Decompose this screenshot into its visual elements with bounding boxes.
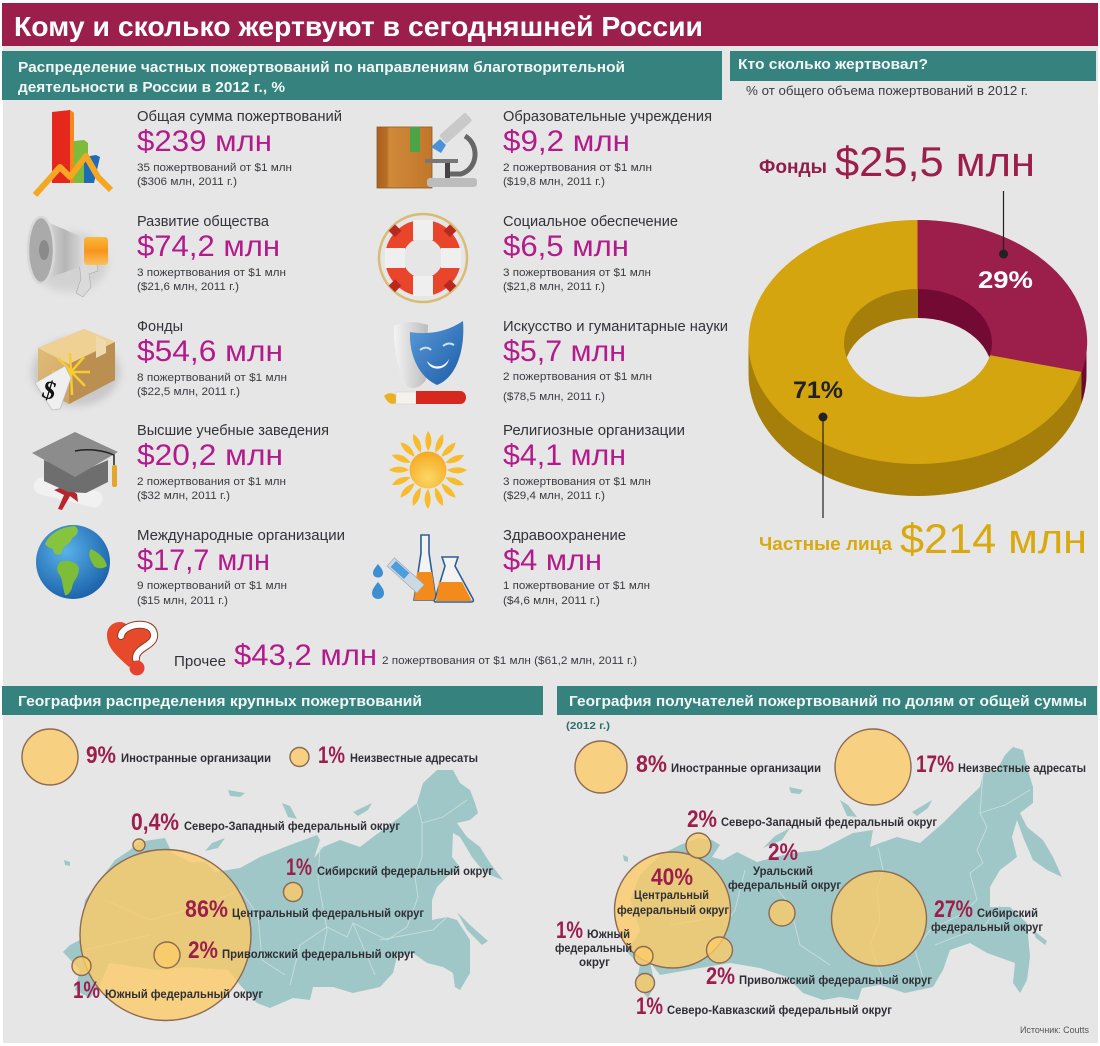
item: international organisations: ($15 млн, 2011 г.) xyxy=(137,595,228,607)
icon: bar chart xyxy=(35,110,111,195)
heading: donation distribution: Распределение частных пожертвований по направлениям благотворительной xyxy=(18,59,625,76)
panel: donation categories xyxy=(28,109,728,676)
item: other: Прочее xyxy=(174,654,226,670)
icon: theatre masks and brush xyxy=(384,321,466,404)
heading: who donated how much: Кто сколько жертвовал? xyxy=(738,56,928,73)
title bar xyxy=(2,3,1098,46)
item: social welfare xyxy=(503,214,678,293)
item: educational institutions: ($19,8 млн, 2011 г.) xyxy=(503,176,605,188)
leader line: foundations xyxy=(999,191,1008,258)
label: foundations amount: $25,5 млн xyxy=(835,138,1035,185)
source note: Источник: Coutts xyxy=(1020,1025,1089,1035)
item: society: ($21,6 млн, 2011 г.) xyxy=(137,281,239,293)
labels, left map: Северо-Западный федеральный округ xyxy=(184,821,400,833)
labels, right map: Иностранные организации xyxy=(671,763,821,775)
item: foundations xyxy=(137,319,287,398)
labels, right map: Приволжский федеральный округ xyxy=(739,975,932,987)
item: international organisations: $17,7 млн xyxy=(137,544,270,577)
item: educational institutions xyxy=(503,109,712,188)
heading: who donated how much xyxy=(730,51,1096,81)
circle: southern district xyxy=(72,956,91,976)
labels, left map: 86% xyxy=(185,896,228,923)
label: 29 percent: 29% xyxy=(978,267,1033,294)
panel: who donated xyxy=(746,84,1087,562)
item: healthcare: Здравоохранение xyxy=(503,528,626,544)
labels, left map: 1% xyxy=(73,977,100,1004)
title bar: Кому и сколько жертвуют в сегодняшней России xyxy=(14,11,703,42)
icon: graduation cap with diploma xyxy=(32,432,118,510)
labels, right map xyxy=(555,751,1086,1020)
labels, left map: Приволжский федеральный округ xyxy=(222,949,415,961)
item: foundations: ($22,5 млн, 2011 г.) xyxy=(137,386,240,398)
labels, right map: федеральный xyxy=(555,943,632,955)
item: religious organisations: ($29,4 млн, 2011 г.) xyxy=(503,490,605,502)
item: arts and humanities: 2 пожертвования от $1 млн xyxy=(503,371,652,383)
label: foundations amount: Фонды xyxy=(759,157,827,178)
map of Russia, left xyxy=(63,770,503,1008)
icon: parcel box with price tag xyxy=(32,329,120,410)
item: arts and humanities: $5,7 млн xyxy=(503,335,626,368)
labels, right map: 27% xyxy=(934,896,973,923)
panel: left map of donations xyxy=(22,729,503,1020)
icon: lifebuoy xyxy=(379,214,467,302)
labels, right map: 1% xyxy=(636,993,663,1020)
labels, left map: Неизвестные адресаты xyxy=(350,753,478,765)
labels, right map: Северо-Кавказский федеральный округ xyxy=(667,1005,892,1017)
heading: geography of donations: География распределения крупных пожертвований xyxy=(18,693,422,710)
circle: siberian district xyxy=(832,871,926,966)
labels, right map: 2% xyxy=(706,963,735,990)
icon: flasks and syringe xyxy=(372,535,473,602)
item: religious organisations: 3 пожертвования от $1 млн xyxy=(503,476,651,488)
circle: central district xyxy=(614,852,730,968)
item: social welfare: 3 пожертвования от $1 млн xyxy=(503,267,651,279)
item: foundations: $54,6 млн xyxy=(137,335,283,368)
circle: foreign organisations xyxy=(575,741,627,793)
labels, left map: 1% xyxy=(286,854,312,881)
item: educational institutions: 2 пожертвования от $1 млн xyxy=(503,162,652,174)
circle: north caucasus district xyxy=(636,974,654,992)
labels, right map: Центральный xyxy=(634,890,709,902)
leader line: private individuals xyxy=(818,412,828,518)
circle: volga district xyxy=(706,937,732,963)
item: educational institutions: $9,2 млн xyxy=(503,125,630,158)
labels, right map: 1% xyxy=(556,917,583,944)
item: foundations: Фонды xyxy=(137,319,183,335)
circle: siberian district xyxy=(284,882,302,902)
item: total: ($306 млн, 2011 г.) xyxy=(137,176,237,188)
labels, left map: 1% xyxy=(318,742,345,769)
circle: ural district xyxy=(769,900,795,926)
labels, right map: Неизвестные адресаты xyxy=(958,763,1086,775)
labels, right map: Уральский xyxy=(753,866,813,878)
item: other: $43,2 млн xyxy=(234,639,377,672)
label: private individuals amount xyxy=(759,515,1087,562)
item: universities: Высшие учебные заведения xyxy=(137,423,329,439)
heading: geography of recipients xyxy=(557,686,1097,715)
item: universities: 2 пожертвования от $1 млн xyxy=(137,476,286,488)
labels, right map: Сибирский xyxy=(977,908,1038,920)
circle: unknown recipients xyxy=(835,729,911,805)
labels, left map: Сибирский федеральный округ xyxy=(317,866,493,878)
item: total: Общая сумма пожертвований xyxy=(137,109,342,125)
label: private individuals amount: Частные лица xyxy=(759,534,893,554)
item: healthcare: ($4,6 млн, 2011 г.) xyxy=(503,595,600,607)
labels, right map: округ xyxy=(579,957,610,969)
item: total: $239 млн xyxy=(137,125,272,158)
item: religious organisations: $4,1 млн xyxy=(503,439,626,472)
item: foundations: 8 пожертвований от $1 млн xyxy=(137,372,287,384)
labels, right map: 2% xyxy=(768,839,798,866)
item: society: $74,2 млн xyxy=(137,230,280,263)
icon: book and microscope xyxy=(377,112,477,188)
icon: sun xyxy=(389,431,467,509)
labels, right map: федеральный округ xyxy=(728,880,841,892)
item: religious organisations: Религиозные организации xyxy=(503,423,685,439)
item: international organisations: 9 пожертвований от $1 млн xyxy=(137,580,287,592)
item: social welfare: $6,5 млн xyxy=(503,230,629,263)
labels, right map: Южный xyxy=(587,929,630,941)
item: international organisations xyxy=(137,528,345,607)
item: religious organisations xyxy=(503,423,685,502)
labels, left map: 9% xyxy=(86,742,116,769)
labels, left map: Южный федеральный округ xyxy=(105,989,263,1001)
icon: globe xyxy=(36,525,110,599)
item: arts and humanities xyxy=(503,319,728,403)
label: 71 percent: 71% xyxy=(793,377,843,404)
heading: donation distribution: деятельности в России в 2012 г., % xyxy=(18,79,285,96)
labels, right map: 2% xyxy=(687,806,717,833)
year note: (2012 г.) xyxy=(566,721,610,732)
item: social welfare: Социальное обеспечение xyxy=(503,214,678,230)
labels, right map: 17% xyxy=(916,751,954,778)
labels, right map: 40% xyxy=(651,864,693,891)
icon: parcel box with price tag: $ xyxy=(39,375,60,406)
subtitle: % от общего объема пожертвований в 2012 г. xyxy=(746,84,1028,98)
heading: geography of donations xyxy=(2,686,543,715)
labels, left map: 0,4% xyxy=(131,809,179,836)
heading: donation distribution xyxy=(2,51,722,100)
icon: heart with question mark xyxy=(107,621,154,676)
item: universities xyxy=(137,423,329,502)
item: universities: ($32 млн, 2011 г.) xyxy=(137,490,230,502)
circle: foreign organisations xyxy=(22,729,78,785)
item: other: 2 пожертвования от $1 млн ($61,2 млн, 2011 г.) xyxy=(382,655,637,667)
circle: north-west district xyxy=(686,833,711,858)
item: other xyxy=(174,639,637,672)
labels, left map: Иностранные организации xyxy=(121,753,271,765)
labels, right map: 8% xyxy=(636,751,667,778)
circle: southern district xyxy=(634,946,653,966)
labels, right map: федеральный округ xyxy=(617,905,729,917)
item: arts and humanities: Искусство и гуманитарные науки xyxy=(503,319,728,335)
heading: geography of recipients: География получателей пожертвований по долям от общей суммы xyxy=(569,693,1087,710)
circle: volga district xyxy=(154,942,180,968)
item: total xyxy=(137,109,342,188)
item: educational institutions: Образовательные учреждения xyxy=(503,109,712,125)
chart: 3D donut xyxy=(748,220,1087,496)
item: total: 35 пожертвований от $1 млн xyxy=(137,162,292,174)
item: society: Развитие общества xyxy=(137,214,270,230)
labels, left map xyxy=(73,742,493,1004)
item: healthcare: 1 пожертвование от $1 млн xyxy=(503,580,650,592)
map of Russia, right xyxy=(623,747,1062,1000)
item: society xyxy=(137,214,286,293)
item: social welfare: ($21,8 млн, 2011 г.) xyxy=(503,281,605,293)
item: international organisations: Международные организации xyxy=(137,528,345,544)
item: society: 3 пожертвования от $1 млн xyxy=(137,267,286,279)
circle: north-west district xyxy=(133,839,145,851)
labels, right map: Северо-Западный федеральный округ xyxy=(721,817,937,829)
item: healthcare: $4 млн xyxy=(503,544,602,577)
circle: unknown recipients xyxy=(290,748,309,766)
labels, left map: Центральный федеральный округ xyxy=(232,908,424,920)
item: universities: $20,2 млн xyxy=(137,439,283,472)
item: healthcare xyxy=(503,528,650,607)
labels, right map: федеральный округ xyxy=(931,922,1043,934)
circle: central district xyxy=(80,850,251,1020)
icon: megaphone xyxy=(28,217,108,297)
panel: right map of recipients xyxy=(555,721,1089,1035)
labels, left map: 2% xyxy=(188,937,218,964)
item: arts and humanities: ($78,5 млн, 2011 г.) xyxy=(503,391,605,403)
label: private individuals amount: $214 млн xyxy=(900,515,1087,562)
